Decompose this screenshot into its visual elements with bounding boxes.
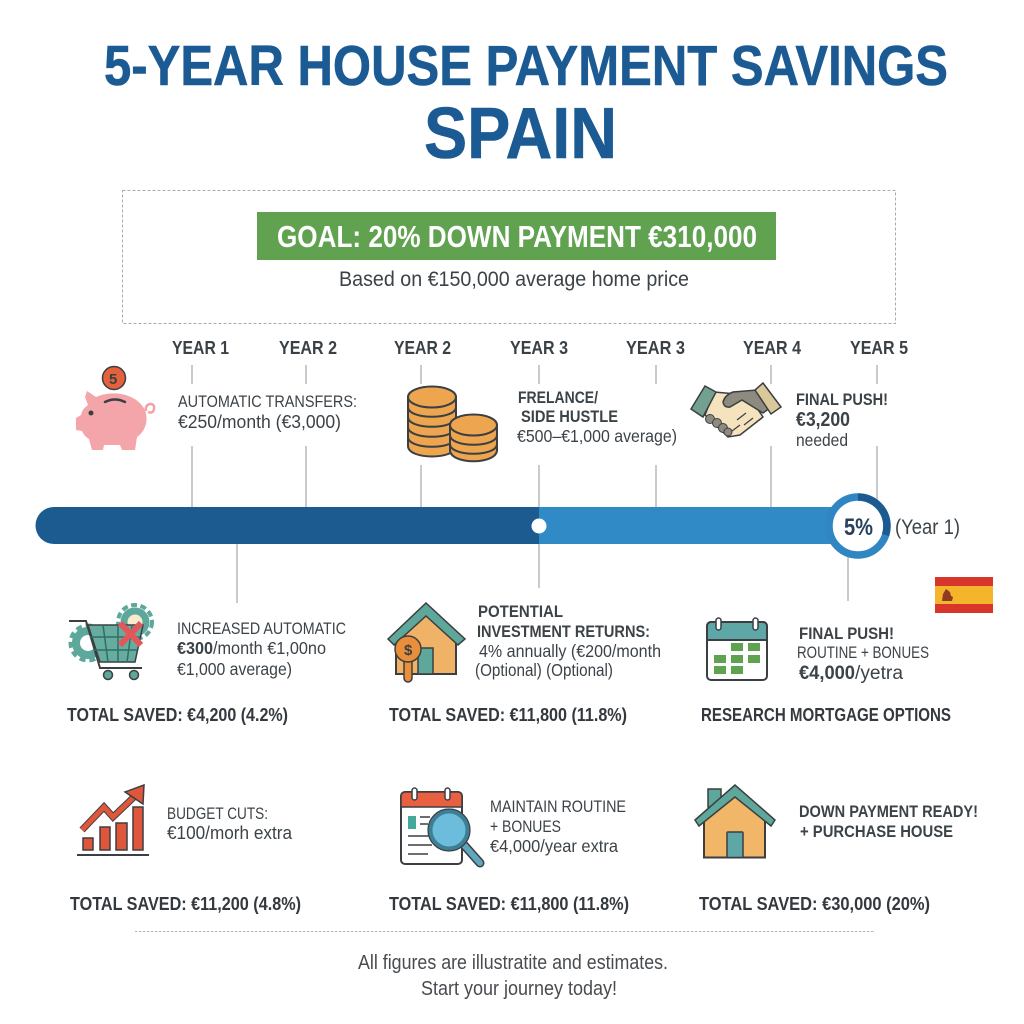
- text: increased automatic: [177, 620, 346, 679]
- year labels: YEAR 5: [850, 337, 908, 358]
- icon: coin stacks: [408, 386, 497, 461]
- icon: house with key: [388, 603, 465, 682]
- year labels: YEAR 2: [394, 337, 451, 358]
- text: investment returns: POTENTIAL: [478, 603, 563, 621]
- text: final push routine: FINAL PUSH!: [799, 625, 894, 643]
- footer note: [358, 952, 668, 1000]
- icon: piggy bank: 5: [109, 371, 117, 388]
- year labels: YEAR 2: [279, 337, 337, 358]
- icon: shopping cart with gears: [69, 605, 152, 680]
- icon: calendar with magnifier: [401, 788, 480, 864]
- text: budget cuts: [167, 805, 293, 843]
- text: investment returns: INVESTMENT RETURNS:: [477, 623, 650, 641]
- year labels: YEAR 1: [172, 337, 229, 358]
- text: total saved year 1: TOTAL SAVED: €4,200 (4.2%): [67, 705, 288, 725]
- text: down payment ready: + PURCHASE HOUSE: [800, 823, 953, 841]
- midpoint marker: [532, 518, 546, 534]
- text: final push: FINAL PUSH!: [796, 391, 888, 409]
- icon: Spain flag: [935, 577, 993, 613]
- text: freelance side hustle: SIDE HUSTLE: [521, 408, 618, 426]
- text: total saved year 5: TOTAL SAVED: €30,000 (20%): [699, 894, 930, 914]
- text: down payment ready: [799, 803, 978, 841]
- text: increased automatic: /month €1,00no: [213, 638, 326, 658]
- text: automatic transfers: [178, 393, 357, 432]
- icon: growth chart: [77, 785, 149, 855]
- icon: calendar: [707, 618, 767, 680]
- text: maintain routine: [490, 798, 626, 856]
- text: automatic transfers: €250/month (€3,000): [178, 412, 341, 432]
- title: [104, 34, 948, 174]
- text: final push routine: €4,000: [799, 663, 855, 684]
- progress ring 5%: [829, 497, 887, 555]
- progress ring 5%: 5%: [844, 514, 873, 541]
- footer note: Start your journey today!: [421, 978, 617, 1000]
- year labels: YEAR 4: [743, 337, 802, 358]
- text: total saved year 4: TOTAL SAVED: €11,800 (11.8%): [389, 894, 629, 914]
- text: maintain routine: MAINTAIN ROUTINE: [490, 798, 626, 816]
- text: final push: [796, 391, 888, 450]
- goal banner: [257, 212, 776, 260]
- timeline ticks: [192, 365, 877, 603]
- text: maintain routine: + BONUES: [490, 818, 561, 836]
- text: increased automatic: INCREASED AUTOMATIC: [177, 620, 346, 638]
- text: increased automatic: €300: [177, 638, 213, 658]
- text: budget cuts: €100/morh extra: [167, 822, 293, 843]
- text: final push routine: ROUTINE + BONUES: [797, 644, 929, 662]
- footer note: All figures are illustratite and estimates.: [358, 952, 668, 974]
- year labels: YEAR 3: [626, 337, 685, 358]
- icon: house: [695, 785, 775, 858]
- text: final push routine: [797, 625, 929, 684]
- text: total saved year 3: TOTAL SAVED: €11,800 (11.8%): [389, 705, 627, 725]
- text: freelance side hustle: €500–€1,000 average): [517, 426, 677, 446]
- goal banner: GOAL: 20% DOWN PAYMENT €310,000: [277, 219, 757, 254]
- text: investment returns: [475, 603, 661, 680]
- year labels: [172, 337, 908, 358]
- text: research mortgage options: RESEARCH MORTGAGE OPTIONS: [701, 705, 951, 725]
- text: final push: needed: [796, 430, 848, 450]
- text: final push routine: /yetra: [855, 663, 903, 684]
- text: final push: €3,200: [796, 409, 850, 431]
- ring caption: (Year 1): [895, 516, 960, 539]
- text: automatic transfers: AUTOMATIC TRANSFERS:: [178, 393, 357, 411]
- text: total saved year 2: TOTAL SAVED: €11,200 (4.8%): [70, 894, 301, 914]
- progress bar: [36, 507, 839, 544]
- text: budget cuts: BUDGET CUTS:: [167, 805, 268, 823]
- text: down payment ready: DOWN PAYMENT READY!: [799, 803, 978, 821]
- text: maintain routine: €4,000/year extra: [490, 836, 618, 856]
- goal subtitle: Based on €150,000 average home price: [339, 268, 689, 291]
- year labels: YEAR 3: [510, 337, 568, 358]
- text: freelance side hustle: [517, 389, 677, 446]
- icon: house with key: $: [404, 642, 413, 659]
- text: increased automatic: €1,000 average): [177, 659, 292, 679]
- text: investment returns: 4% annually (€200/month: [479, 641, 661, 661]
- icon: handshake: [691, 383, 781, 437]
- text: investment returns: (Optional) (Optional): [475, 660, 613, 680]
- title: SPAIN: [424, 94, 617, 174]
- text: freelance side hustle: FRELANCE/: [518, 389, 598, 407]
- icon: piggy bank: [76, 366, 154, 450]
- panel: goal: [122, 190, 896, 324]
